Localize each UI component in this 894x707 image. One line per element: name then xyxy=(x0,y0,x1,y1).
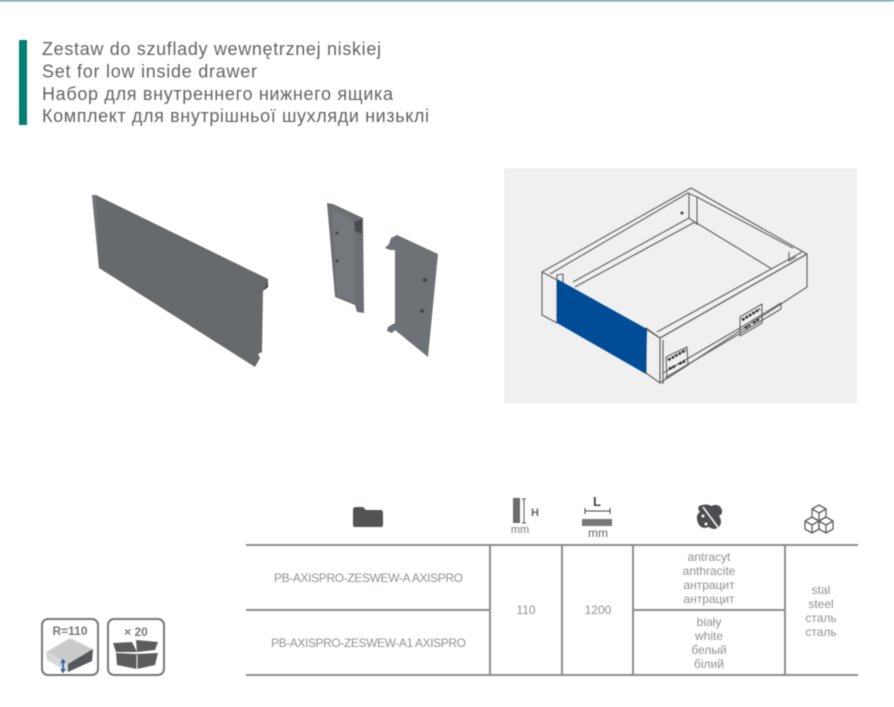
badge: drawer height R=110: R=110 xyxy=(52,624,88,638)
colour: white: white xyxy=(694,629,723,643)
product: long back panel xyxy=(92,195,268,367)
rear runner clip xyxy=(740,304,762,336)
icon: length in mm: mm xyxy=(588,526,608,540)
title text in four languages: Комплект для внутрішньої шухляди низьклі xyxy=(42,106,429,126)
drawer line art xyxy=(542,188,807,384)
badge: pack of 20 xyxy=(108,619,164,675)
icon: height in mm xyxy=(511,498,539,536)
colour: white: білий xyxy=(694,657,724,671)
length value: 1200 xyxy=(585,603,612,617)
material: steel: сталь xyxy=(805,611,837,625)
colour: anthracite: antracyt xyxy=(688,550,731,564)
colour: anthracite: антрацит xyxy=(683,578,735,592)
colour: white xyxy=(691,615,727,671)
title text in four languages: Zestaw do szuflady wewnętrznej niskiej xyxy=(42,39,381,59)
material: steel: сталь xyxy=(805,625,837,639)
badge: pack of 20: × 20 xyxy=(124,625,148,639)
icon: palette xyxy=(697,504,722,530)
front runner clip xyxy=(666,347,688,378)
colour: anthracite xyxy=(683,550,736,606)
material: steel xyxy=(805,583,837,639)
table header icons xyxy=(353,494,833,540)
data table xyxy=(246,545,858,675)
colour: anthracite: антрацит xyxy=(683,592,735,606)
badge: drawer height R=110 xyxy=(42,619,98,675)
title text in four languages xyxy=(42,39,429,126)
product codes xyxy=(271,571,466,650)
colour: white: biały xyxy=(697,615,721,629)
icon: folder xyxy=(353,507,383,527)
material: steel: steel xyxy=(808,597,834,611)
title accent bar xyxy=(19,40,27,125)
title text in four languages: Set for low inside drawer xyxy=(42,62,257,82)
top teal rule xyxy=(0,0,894,2)
material: steel: stal xyxy=(812,583,830,597)
product: left side bracket xyxy=(327,203,364,313)
drawing background xyxy=(504,168,857,403)
product: right side bracket xyxy=(385,235,438,357)
colour: white: белый xyxy=(691,643,727,657)
panel: assembled drawer drawing xyxy=(504,168,857,403)
height value: 110 xyxy=(516,603,536,617)
colour: anthracite: anthracite xyxy=(683,564,736,578)
product codes: PB-AXISPRO-ZESWEW-A1 AXISPRO xyxy=(271,636,466,650)
icon: length in mm xyxy=(582,494,612,540)
icon: height in mm: mm xyxy=(511,524,529,536)
product codes: PB-AXISPRO-ZESWEW-A AXISPRO xyxy=(274,571,463,585)
icon: length in mm: L xyxy=(593,494,601,509)
icon: cubes xyxy=(805,505,833,533)
table rules xyxy=(246,545,858,675)
title text in four languages: Набор для внутреннего нижнего ящика xyxy=(42,84,394,104)
icon: height in mm: H xyxy=(531,507,539,519)
drawer front blue panel xyxy=(557,279,647,374)
title block xyxy=(19,39,429,126)
